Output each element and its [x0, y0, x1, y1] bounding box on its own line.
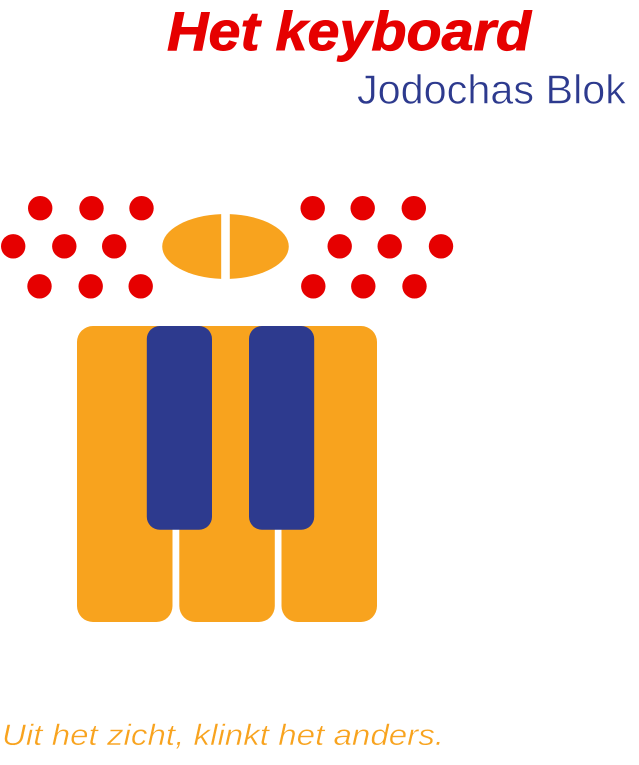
- icon: left speaker dots: [1, 196, 154, 298]
- author: Jodochas Blok: [357, 66, 626, 112]
- title: Het keyboard: [167, 0, 532, 62]
- icon: keyboard keys: [77, 326, 377, 622]
- slogan: Uit het zicht, klinkt het anders.: [2, 719, 444, 752]
- black key right: [249, 326, 314, 530]
- icon: split oval: [162, 214, 289, 279]
- icon: right speaker dots: [300, 196, 453, 298]
- orange keys body: [77, 326, 377, 622]
- black key left: [147, 326, 212, 530]
